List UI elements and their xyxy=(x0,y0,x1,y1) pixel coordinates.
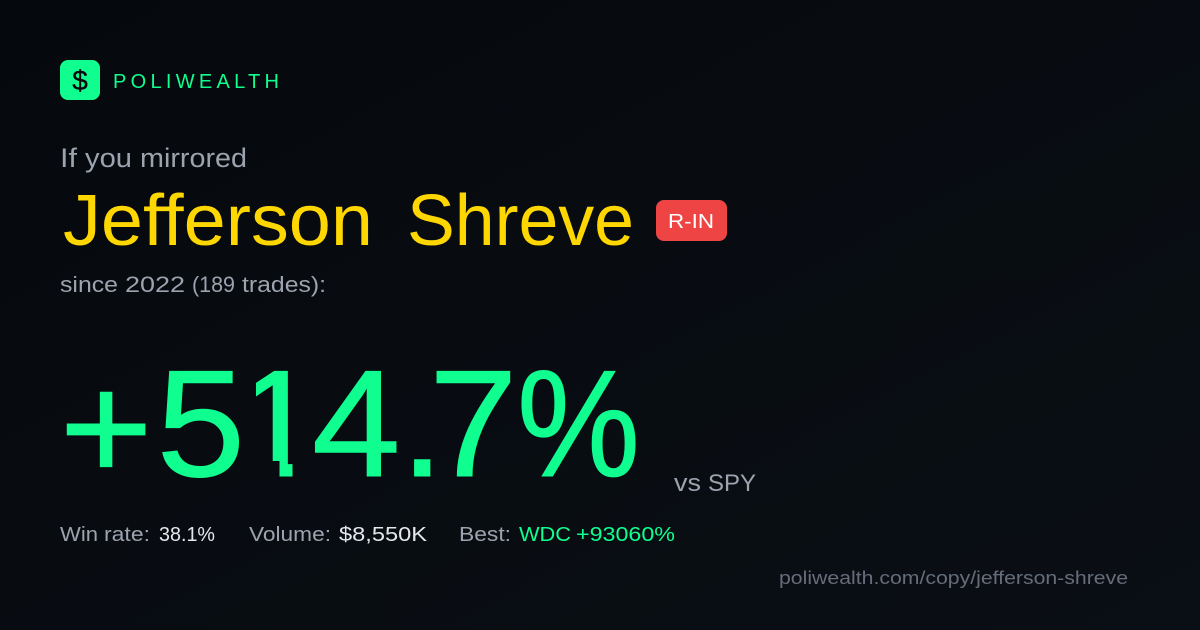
stat: volume xyxy=(249,523,427,546)
brand name: POLIWEALTH xyxy=(113,71,279,93)
icon: dollar badge: $ xyxy=(72,65,88,96)
stat: best trade: +93060% xyxy=(576,523,675,546)
stat: win rate: Win xyxy=(60,523,98,546)
benchmark label xyxy=(674,470,756,497)
stat: best trade xyxy=(459,523,675,546)
period and trades xyxy=(60,272,326,297)
headline return: 1 xyxy=(233,339,322,509)
stat: win rate: 38.1% xyxy=(159,523,215,546)
politician name xyxy=(63,180,634,261)
stat: best trade: Best: xyxy=(459,523,511,546)
politician name: Jefferson xyxy=(63,180,373,261)
stat: win rate: rate: xyxy=(104,523,150,546)
party badge: R-IN xyxy=(668,210,714,233)
benchmark label: SPY xyxy=(708,470,756,497)
intro line xyxy=(60,143,247,173)
stat: volume: $8,550K xyxy=(339,523,427,546)
stats row xyxy=(60,523,675,546)
brand logo xyxy=(60,60,279,100)
headline return xyxy=(66,370,636,478)
stat: volume: Volume: xyxy=(249,523,331,546)
period and trades: (189 xyxy=(192,272,235,297)
benchmark label: vs xyxy=(674,470,701,497)
stat: win rate xyxy=(60,523,215,546)
icon: dollar badge xyxy=(60,60,100,100)
stat: best trade: WDC xyxy=(519,523,571,546)
period and trades: 2022 xyxy=(125,272,185,297)
politician name: Shreve xyxy=(407,180,634,261)
intro line: If xyxy=(60,143,78,173)
headline return: % xyxy=(517,339,640,509)
headline return: +5 xyxy=(60,339,245,513)
period and trades: trades): xyxy=(242,272,326,297)
headline return: 4.7 xyxy=(312,339,518,509)
period and trades: since xyxy=(60,272,118,297)
party badge xyxy=(656,200,727,241)
profile url: poliwealth.com/copy/jefferson-shreve xyxy=(779,567,1128,588)
intro line: you xyxy=(85,143,132,173)
intro line: mirrored xyxy=(140,143,247,173)
